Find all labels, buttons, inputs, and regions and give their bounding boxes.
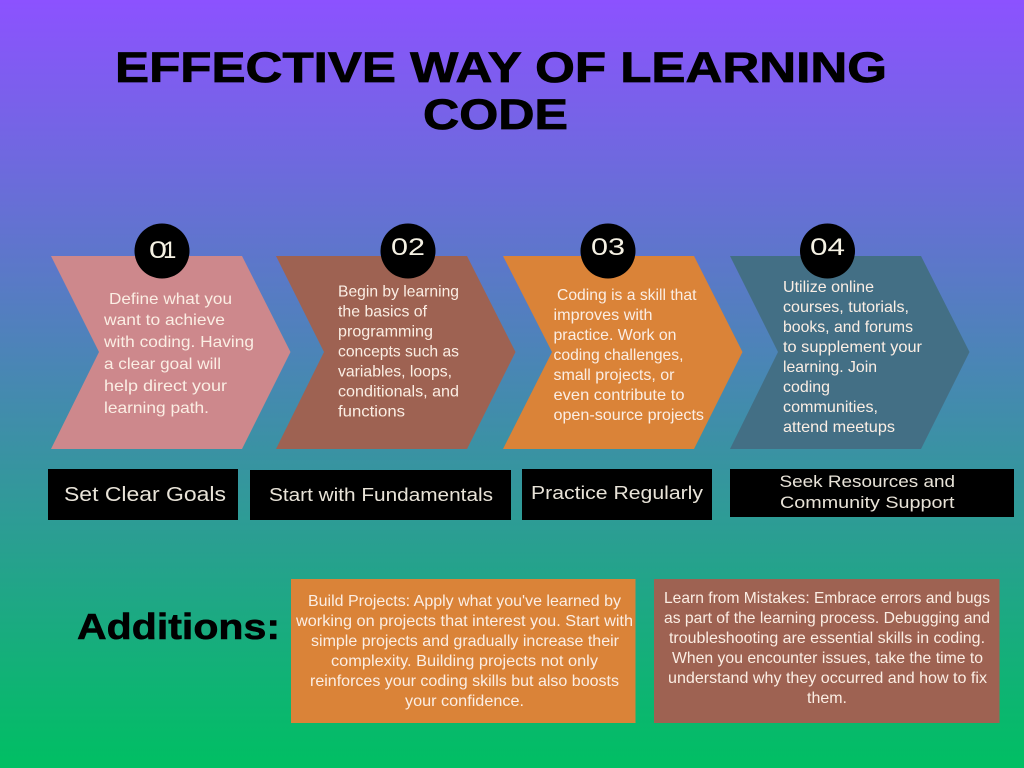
heading: Additions: Additions: [77,606,280,647]
number badge 01 [134,224,190,278]
step 2 text: programming [338,324,433,340]
step 1 text: learning path. [104,400,209,417]
step 2 chevron panel [276,256,516,449]
step 2 text: conditionals, and [338,384,459,400]
label: Start with Fundamentals [250,470,511,520]
step 2 text: concepts such as [338,344,459,360]
label: Set Clear Goals [48,469,238,520]
label: Seek Resources and Community Support: Seek Resources and [780,472,955,491]
panel: build projects: Build Projects: Apply what you've learned by [308,593,621,610]
number badge 04 [800,224,855,278]
step 3 text: even contribute to [554,387,685,404]
step 1 text: want to achieve [103,312,225,329]
label: Set Clear Goals: Set Clear Goals [64,484,226,506]
panel: build projects: simple projects and gradually increase their [311,633,620,650]
step 2 text: the basics of [338,304,428,320]
number badge 01: 0 [149,237,167,264]
step 3 text: improves with [554,307,652,324]
panel: learn from mistakes: them. [807,690,847,707]
step 3 text: practice. Work on [554,327,676,344]
step 4 chevron panel [730,256,970,449]
title: CODE [423,91,568,139]
panel: build projects: working on projects that interest you. Start with [295,613,633,630]
step 3 text [554,287,704,424]
step 2 text: Begin by learning [338,284,459,300]
step 4 text: learning. Join [783,359,877,376]
label: Start with Fundamentals: Start with Fundamentals [269,485,493,505]
step 4 text: coding [783,379,830,396]
step 2 text: functions [338,404,405,420]
panel: build projects: reinforces your coding skills but also boosts [310,673,619,690]
number badge 03: 03 [591,234,625,261]
panel: learn from mistakes: as part of the learning process. Debugging and [664,610,990,627]
number badge 04: 04 [810,234,845,261]
step 3 chevron panel [503,256,742,449]
number badge 02: 02 [391,234,425,261]
label: Seek Resources and Community Support [730,469,1014,517]
step 1 text: Define what you [109,291,232,308]
step 4 text: courses, tutorials, [783,299,909,316]
panel: build projects: complexity. Building projects not only [331,653,598,670]
title: EFFECTIVE WAY OF LEARNING [115,44,887,92]
label: Seek Resources and Community Support: Community Support [780,493,955,512]
step 4 text: attend meetups [783,419,895,436]
step 3 text: coding challenges, [554,347,684,364]
step 1 text: help direct your [104,378,228,395]
number badge 03 [580,224,636,278]
step 4 text [783,279,923,436]
title [115,44,887,139]
step 4 text: to supplement your [783,339,923,356]
label: Practice Regularly [522,469,712,520]
label: Practice Regularly: Practice Regularly [531,483,703,503]
panel: learn from mistakes: troubleshooting are essential skills in coding. [669,630,985,647]
step 1 text [103,291,254,417]
step 1 text: a clear goal will [104,356,221,373]
panel: build projects [291,579,636,723]
step 4 text: communities, [783,399,878,416]
panel: learn from mistakes: Learn from Mistakes: Embrace errors and bugs [664,590,990,607]
step 4 text: books, and forums [783,319,913,336]
step 3 text: open-source projects [554,407,704,424]
step 2 text [338,284,459,420]
step 3 text: small projects, or [554,367,675,384]
panel: learn from mistakes [654,579,1000,723]
step 4 text: Utilize online [783,279,874,296]
step 2 text: variables, loops, [338,364,452,380]
step 3 text: Coding is a skill that [557,287,697,304]
panel: learn from mistakes: understand why they occurred and how to fix [668,670,987,687]
number badge 02 [380,224,436,278]
number badge 01: 1 [163,237,176,264]
panel: learn from mistakes: When you encounter issues, take the time to [672,650,983,667]
step 1 text: with coding. Having [103,334,254,351]
panel: build projects: your confidence. [405,693,524,710]
step 1 chevron panel [51,256,290,449]
